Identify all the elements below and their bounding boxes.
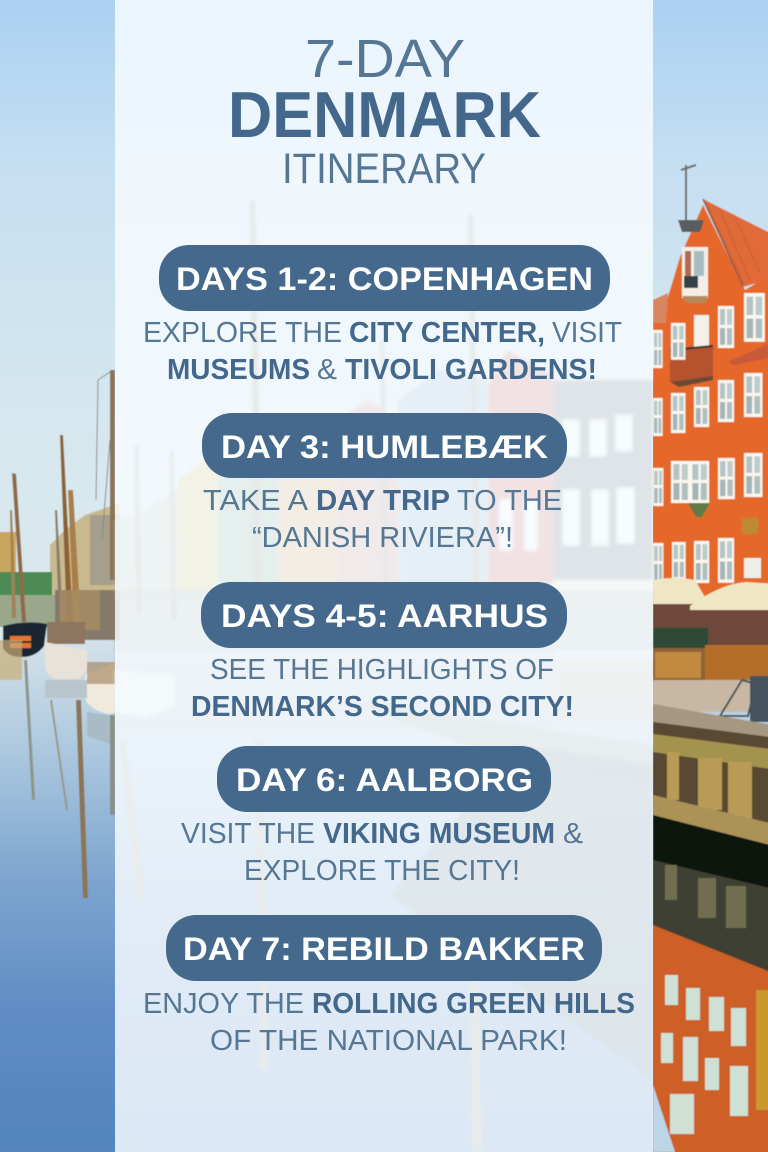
description: VIKING MUSEUM <box>323 818 555 850</box>
description: “DANISH RIVIERA”! <box>252 522 513 554</box>
description: TAKE A <box>203 485 309 517</box>
description <box>143 317 622 386</box>
right building <box>653 165 768 1152</box>
description: ENJOY THE <box>143 988 304 1020</box>
title: ITINERARY <box>282 145 486 193</box>
description <box>191 654 574 723</box>
description: OF THE NATIONAL PARK! <box>210 1025 567 1057</box>
description: EXPLORE THE <box>143 317 342 349</box>
description: CITY CENTER, <box>349 317 545 349</box>
left harbour scene <box>0 370 120 898</box>
description: MUSEUMS <box>167 354 310 386</box>
stop: Days 4-5 Aarhus <box>191 582 574 723</box>
description: ROLLING GREEN HILLS <box>312 988 635 1020</box>
description: SEE THE HIGHLIGHTS OF <box>210 654 554 686</box>
title <box>228 29 541 193</box>
pill heading <box>201 582 567 648</box>
pill heading: DAYS 1-2: COPENHAGEN <box>176 261 593 297</box>
pill heading: DAY 7: REBILD BAKKER <box>183 931 585 967</box>
stop: Days 1-2 Copenhagen <box>143 245 622 386</box>
pill heading: DAY 3: HUMLEBÆK <box>221 429 548 465</box>
pill heading <box>159 245 610 311</box>
description <box>143 988 635 1057</box>
description: TIVOLI GARDENS! <box>345 354 597 386</box>
pill heading <box>217 746 551 812</box>
stop: Day 6 Aalborg <box>181 746 583 887</box>
description: DAY TRIP <box>316 485 450 517</box>
description: VISIT <box>552 317 622 349</box>
description: DENMARK’S SECOND CITY! <box>191 691 574 723</box>
description: & <box>563 818 583 850</box>
stop: Day 7 Rebild Bakker <box>143 915 635 1057</box>
pill heading: DAYS 4-5: AARHUS <box>221 598 548 634</box>
title: 7-DAY <box>305 29 465 89</box>
translucent central panel <box>115 0 653 1152</box>
description: TO THE <box>457 485 562 517</box>
pill heading <box>202 413 567 478</box>
description <box>181 818 583 887</box>
pill heading: DAY 6: AALBORG <box>236 762 533 798</box>
pill heading <box>166 915 602 981</box>
description <box>203 485 562 554</box>
title: DENMARK <box>228 78 541 151</box>
faint scene behind panel <box>115 200 655 1152</box>
description: & <box>317 354 337 386</box>
stop: Day 3 Humlebæk <box>202 413 567 554</box>
description: EXPLORE THE CITY! <box>244 855 520 887</box>
description: VISIT THE <box>181 818 315 850</box>
